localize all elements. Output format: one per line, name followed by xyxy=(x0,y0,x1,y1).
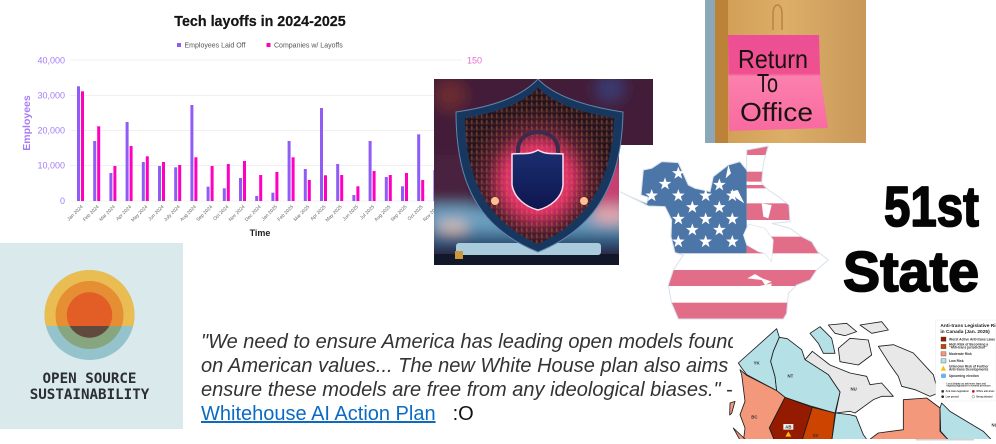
legend labels: Moderate Risk xyxy=(949,352,972,356)
x axis month labels: Nov 2024 xyxy=(228,204,247,223)
x axis month labels: Jun 2025 xyxy=(342,204,360,222)
legend labels: Anti-trans Developments xyxy=(949,367,989,371)
x axis month labels: Sep 2024 xyxy=(195,204,214,223)
Alberta label and warning icon: AB xyxy=(785,424,791,429)
x axis month labels: Oct 2024 xyxy=(212,204,230,222)
Victoria Island xyxy=(810,327,835,353)
Saskatchewan xyxy=(802,407,835,442)
legend labels xyxy=(946,337,995,399)
heading: 51st State: 51st xyxy=(884,175,979,239)
x axis month labels: Apr 2024 xyxy=(115,204,133,222)
map outline xyxy=(620,146,828,319)
chart title: Tech layoffs in 2024-2025 xyxy=(174,14,346,30)
legend labels: Being debated xyxy=(976,395,993,398)
legend swatches xyxy=(941,337,946,363)
x axis month labels: May 2024 xyxy=(130,204,149,223)
chart: tech layoffs xyxy=(21,14,482,238)
y axis labels: 0 xyxy=(60,196,65,206)
heading: 51st State xyxy=(843,175,980,304)
Manitoba xyxy=(832,413,867,439)
legend labels: Anti-trans legislation xyxy=(946,390,969,393)
x axis month labels: Mar 2024 xyxy=(98,204,117,223)
handwritten text: Return xyxy=(738,44,808,74)
y axis labels: 10,000 xyxy=(37,160,65,170)
handwritten text: To xyxy=(757,68,778,98)
x axis month labels: Dec 2024 xyxy=(244,204,263,223)
chart legend xyxy=(177,42,343,50)
province labels: NU xyxy=(851,386,857,391)
logo mark xyxy=(44,270,134,360)
x axis month labels: Feb 2024 xyxy=(82,204,101,223)
x axis month labels: Jan 2024 xyxy=(66,204,85,222)
y axis labels xyxy=(37,56,65,206)
y axis labels: 40,000 xyxy=(37,56,65,66)
chart legend: Employees Laid Off xyxy=(184,42,246,50)
image: cyber security shield xyxy=(434,79,653,265)
province labels: BC xyxy=(751,414,757,419)
chart legend: Companies w/ Layoffs xyxy=(274,42,343,50)
legend labels: Upcoming election xyxy=(949,374,979,378)
x axis month labels xyxy=(66,204,441,223)
image: return to office sticky note xyxy=(705,0,866,143)
flag fill xyxy=(640,146,819,318)
legend labels: Worst Active Anti-trans Laws xyxy=(949,337,995,341)
legend title: in Canada (Jan. 2025) xyxy=(940,329,990,335)
x axis month labels: Sep 2025 xyxy=(390,204,409,223)
Nunavut mainland xyxy=(805,351,893,413)
image background xyxy=(434,79,653,265)
Hudson Bay xyxy=(743,224,773,262)
x axis month labels: Jul 2025 xyxy=(359,204,376,221)
x axis month labels: Nov 2025 xyxy=(422,204,441,223)
provinces and territories xyxy=(730,322,993,442)
legend labels: "Anti-trans jurisdiction" xyxy=(949,346,987,350)
legend labels: ongoing legislation in several provinces xyxy=(946,384,991,387)
arctic channels xyxy=(726,165,772,218)
x axis month labels: Feb 2025 xyxy=(276,204,295,223)
padlock xyxy=(512,132,563,210)
flag stars xyxy=(645,167,739,247)
province labels xyxy=(751,361,996,438)
x axis month labels: Apr 2025 xyxy=(309,204,328,222)
logo text xyxy=(30,371,150,403)
legend labels: Law passed xyxy=(946,397,959,399)
bars: employees laid off xyxy=(77,86,436,201)
x axis title: Time xyxy=(250,228,270,238)
x axis month labels: Jan 2025 xyxy=(261,204,279,222)
Baffin and arctic islands xyxy=(878,345,938,396)
Newfoundland and Labrador xyxy=(940,403,993,442)
y axis title: Employees xyxy=(21,95,33,151)
province labels: NT xyxy=(787,373,794,378)
province labels: SK xyxy=(813,433,820,438)
sticky note xyxy=(728,35,828,131)
Pacific islands xyxy=(730,401,745,440)
x axis month labels: Mar 2025 xyxy=(293,204,311,223)
map: Canada with US flag xyxy=(620,146,829,320)
logo panel: open source sustainability xyxy=(0,243,183,429)
legend labels: Low Risk xyxy=(949,359,964,363)
bars: companies with layoffs xyxy=(81,91,424,201)
British Columbia xyxy=(740,370,785,442)
heading: 51st State: State xyxy=(843,240,979,304)
handwritten text: Office xyxy=(740,97,813,127)
x axis month labels: May 2025 xyxy=(324,204,344,223)
x axis month labels: Aug 2024 xyxy=(179,204,198,223)
wood door xyxy=(705,0,866,143)
quote: White House AI Action Plan: ensure these models are free from any ideological biases." - xyxy=(201,379,733,401)
Great Lakes xyxy=(747,274,772,295)
legend labels: High Risk of Becoming a xyxy=(949,343,988,347)
x axis month labels: Aug 2025 xyxy=(373,204,392,223)
logo text: SUSTAINABILITY xyxy=(30,387,149,403)
map legend xyxy=(936,320,996,401)
x axis month labels: July 2024 xyxy=(163,204,182,223)
x axis month labels: Oct 2025 xyxy=(407,204,425,222)
link: Whitehouse AI Action Plan :O xyxy=(201,403,474,425)
province labels: YK xyxy=(754,361,761,366)
handwritten text xyxy=(738,44,813,127)
shield xyxy=(456,79,623,252)
quote: White House AI Action Plan xyxy=(201,330,733,425)
y axis labels: 20,000 xyxy=(37,126,65,136)
logo text: OPEN SOURCE xyxy=(43,371,136,387)
legend labels: Local debate on anti-trans laws and xyxy=(946,382,986,385)
Alberta xyxy=(769,397,812,442)
Alberta label and warning icon xyxy=(783,424,793,437)
y axis labels: 30,000 xyxy=(37,90,65,100)
legend labels: Unknown Risk of Further xyxy=(949,364,989,368)
Ontario and Quebec xyxy=(870,398,947,439)
legend labels: Offers anti-trans xyxy=(976,390,995,393)
x axis month labels: Jun 2024 xyxy=(147,204,166,222)
Yukon xyxy=(738,329,779,391)
Northwest Territories xyxy=(771,337,840,413)
map: anti-trans legislative risk in Canada xyxy=(729,320,996,440)
right axis label: 150 xyxy=(467,56,482,66)
warning and election icons xyxy=(941,366,946,378)
